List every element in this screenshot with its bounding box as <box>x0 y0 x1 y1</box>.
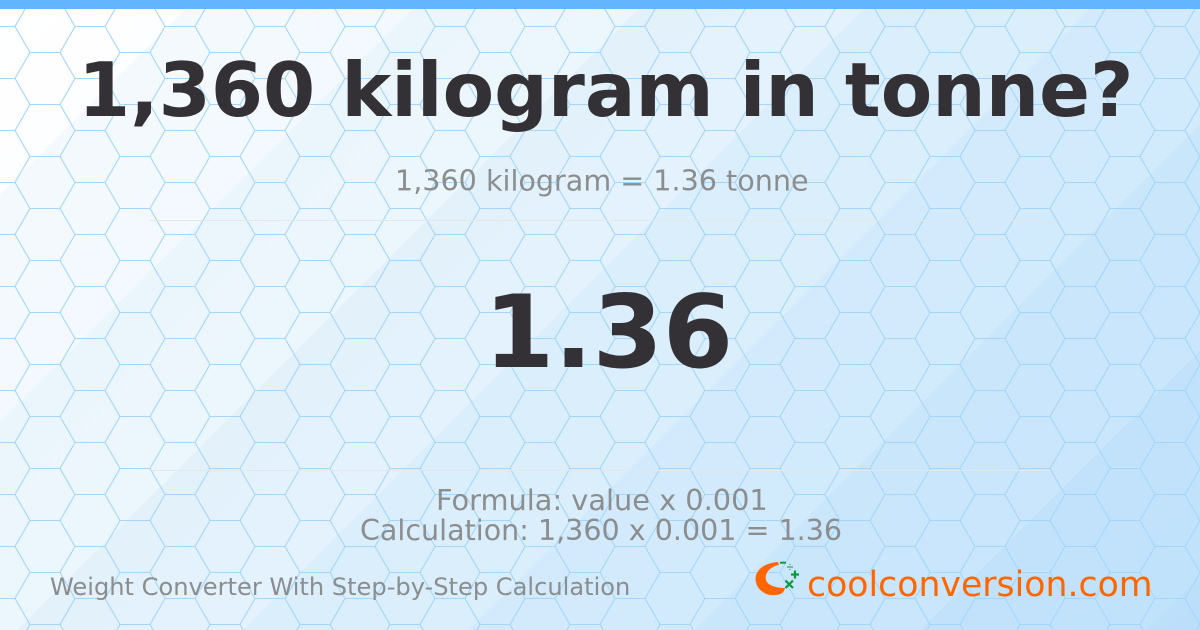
title: 1,360 kilogram in tonne? <box>78 46 1133 134</box>
icon: coolconversion logo <box>756 562 799 595</box>
subtitle: conversion result: 1,360 kilogram = 1.36 tonne <box>395 164 809 198</box>
footer tagline: Weight Converter With Step-by-Step Calculation <box>50 573 630 601</box>
site name: coolconversion.com <box>807 565 1153 605</box>
formula: Formula: value x 0.001 <box>436 483 768 517</box>
calculation: Calculation: 1,360 x 0.001 = 1.36 <box>360 513 842 547</box>
main value: 1.36 <box>484 273 733 391</box>
top bar <box>0 0 1200 9</box>
